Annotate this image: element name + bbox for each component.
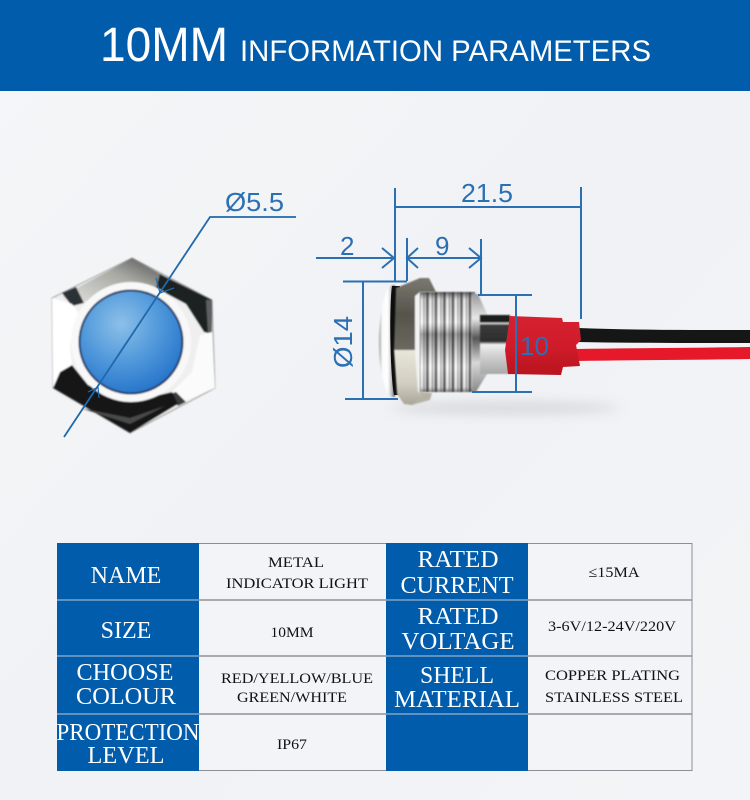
row: size	[101, 618, 314, 644]
row: rated current	[400, 547, 640, 599]
dimension: thread 9	[407, 231, 481, 296]
threaded body	[417, 292, 487, 392]
parameter table	[56, 543, 692, 771]
icon: indicator light front view	[52, 258, 215, 433]
dimension: total length 21.5: 21.5	[461, 178, 513, 208]
dimension: diameter 14: Ø14	[328, 316, 358, 368]
row: shell material: MATERIAL	[394, 687, 520, 713]
icon: indicator light side view	[379, 278, 750, 414]
dimension: thread 9: 9	[435, 231, 449, 261]
dimension: lens diameter	[64, 187, 296, 437]
header banner	[0, 0, 750, 91]
row: size: 10MM	[270, 625, 314, 641]
dimension: lens diameter: Ø5.5	[225, 187, 284, 217]
row: shell material: SHELL	[420, 663, 494, 689]
title: INFORMATION PARAMETERS	[240, 35, 651, 68]
row: shell material: STAINLESS STEEL	[545, 690, 683, 706]
row: shell material	[394, 663, 683, 713]
dimension: width 10	[472, 295, 549, 392]
row: rated current: RATED	[418, 547, 498, 573]
row: name	[91, 555, 368, 592]
neck	[480, 315, 510, 374]
gasket	[390, 286, 400, 395]
row: size: SIZE	[101, 618, 151, 644]
dimension: diameter 14	[328, 282, 407, 399]
dimension: flange 2: 2	[340, 231, 354, 261]
row: protection: IP67	[277, 737, 308, 753]
row: rated current: ≤15MA	[588, 565, 640, 581]
flange	[379, 285, 395, 397]
dimension: total length 21.5	[395, 178, 581, 319]
row: rated voltage: VOLTAGE	[402, 629, 514, 655]
row: rated voltage: 3-6V/12-24V/220V	[548, 619, 676, 635]
row: colour: RED/YELLOW/BLUE	[221, 671, 373, 687]
title: 10MM	[100, 19, 228, 72]
dimension: width 10: 10	[520, 331, 549, 361]
row: colour: GREEN/WHITE	[237, 690, 347, 706]
hex nut	[394, 278, 436, 405]
contact shadow	[390, 402, 620, 414]
row: rated voltage: RATED	[418, 604, 498, 630]
wires	[576, 328, 750, 361]
row: name: NAME	[91, 563, 161, 589]
row: name: METAL	[268, 555, 324, 571]
dimension: flange 2	[316, 231, 395, 268]
row: protection	[56, 720, 308, 769]
row: name: INDICATOR LIGHT	[226, 576, 368, 592]
row: rated current: CURRENT	[400, 573, 514, 599]
row: colour	[76, 660, 373, 710]
row: rated voltage	[402, 604, 676, 655]
row: protection: PROTECTION	[56, 720, 200, 746]
red sleeve	[505, 316, 581, 375]
row: colour: COLOUR	[76, 684, 176, 710]
row: protection: LEVEL	[88, 743, 164, 769]
row: colour: CHOOSE	[76, 660, 174, 686]
row: shell material: COPPER PLATING	[545, 668, 680, 684]
